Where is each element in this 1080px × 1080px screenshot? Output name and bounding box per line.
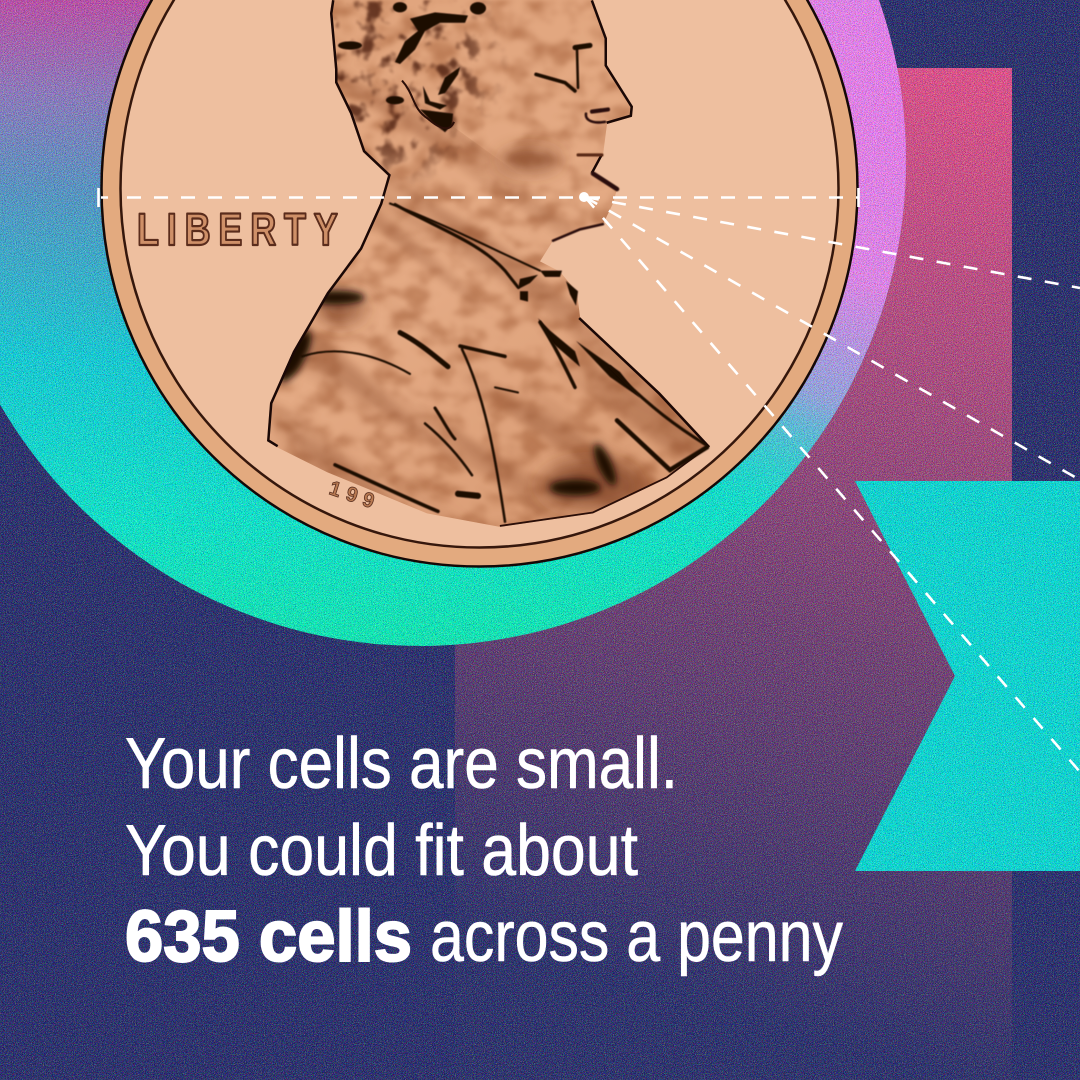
headline	[125, 724, 843, 977]
coin face	[120, 0, 838, 548]
coin rim	[102, 0, 858, 566]
dark creases	[272, 290, 621, 496]
radiating dashed lines	[585, 197, 1080, 772]
coat folds	[302, 322, 707, 522]
line one: Your cells are small.	[125, 724, 678, 804]
LIBERTY inscription: LIBERTY	[137, 204, 338, 255]
bold figure: 635 cells	[125, 897, 412, 977]
penny	[41, 0, 901, 874]
bow tie	[518, 271, 640, 398]
eye and brow	[536, 45, 590, 91]
teal arrow shape	[855, 481, 1080, 871]
collar	[390, 204, 540, 287]
origin dot	[579, 192, 589, 202]
diameter dashed line	[98, 188, 859, 207]
nose and mouth	[553, 109, 617, 241]
hair mottling	[334, 0, 506, 184]
pink gradient panel	[455, 68, 1012, 1080]
mint date: 199	[326, 477, 377, 513]
line three	[125, 897, 843, 977]
directional coat folds texture	[271, 64, 704, 518]
remainder: across a penny	[430, 897, 843, 977]
gradient circle behind coin	[0, 0, 906, 646]
contour of bust	[267, 0, 710, 447]
mottled copper texture	[260, 0, 720, 537]
ear	[402, 81, 454, 128]
Lincoln bust	[267, 0, 1075, 768]
hair detail	[338, 2, 486, 132]
line two: You could fit about	[125, 811, 638, 891]
soft shadows	[315, 148, 640, 510]
